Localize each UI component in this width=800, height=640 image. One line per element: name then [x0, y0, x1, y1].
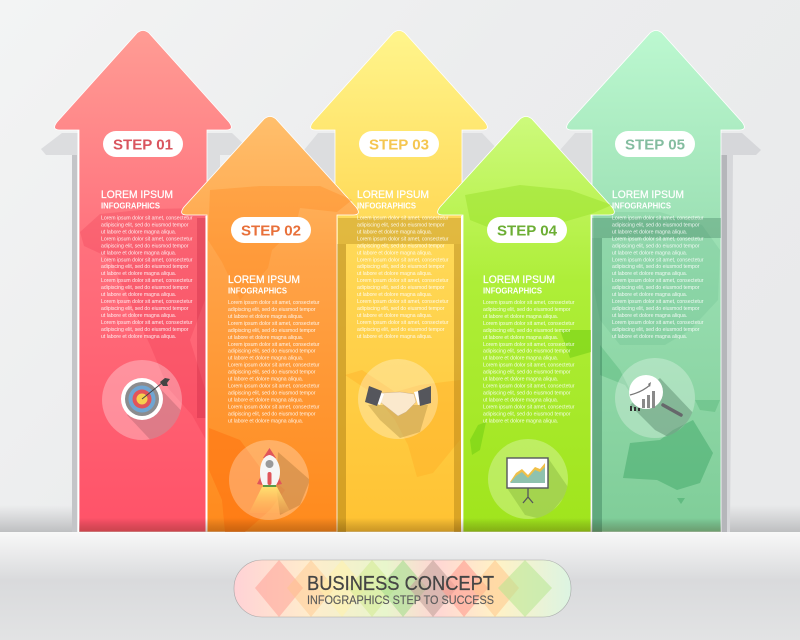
step 5 labels [612, 131, 704, 340]
step 2 pill: STEP 02 [241, 222, 301, 240]
step 3 body text: ut labore et dolore magna aliqua. [357, 292, 432, 298]
step 3 heading: INFOGRAPHICS [357, 202, 416, 210]
step 4 body text: ut labore et dolore magna aliqua. [483, 335, 558, 341]
step 5 body text: adipiscing elit, sed do eiusmod tempor [612, 306, 700, 312]
step 3 body text: Lorem ipsum dolor sit amet, consectetur [357, 299, 449, 305]
step 4 body text: ut labore et dolore magna aliqua. [483, 418, 558, 424]
step 1 body text: Lorem ipsum dolor sit amet, consectetur [101, 257, 193, 263]
step 2 body text: Lorem ipsum dolor sit amet, consectetur [228, 384, 320, 390]
step 5 body text: adipiscing elit, sed do eiusmod tempor [612, 264, 700, 270]
step 2 body text: ut labore et dolore magna aliqua. [228, 397, 303, 403]
step 2 body text: adipiscing elit, sed do eiusmod tempor [228, 411, 316, 417]
step 1 labels [101, 131, 193, 340]
step 4 body text: adipiscing elit, sed do eiusmod tempor [483, 349, 571, 355]
step 5 body text: ut labore et dolore magna aliqua. [612, 292, 687, 298]
step 3 body text: adipiscing elit, sed do eiusmod tempor [357, 285, 445, 291]
step 5 body text: adipiscing elit, sed do eiusmod tempor [612, 222, 700, 228]
step 2 pill [231, 217, 311, 243]
arrow 3: yellow [311, 30, 487, 532]
arrow 5: mint green [567, 30, 744, 532]
icon: rocket [229, 440, 310, 520]
step 4 heading [483, 274, 555, 296]
map: africa [345, 370, 460, 477]
banner title text: BUSINESS CONCEPT [307, 573, 494, 595]
step 4 body text: Lorem ipsum dolor sit amet, consectetur [483, 404, 575, 410]
step 1 body text: ut labore et dolore magna aliqua. [101, 313, 176, 319]
title banner [234, 560, 571, 617]
banner diamonds [255, 560, 552, 617]
step 3 body text: Lorem ipsum dolor sit amet, consectetur [357, 216, 449, 222]
step 5 body text: Lorem ipsum dolor sit amet, consectetur [612, 216, 704, 222]
step 3 pill: STEP 03 [369, 136, 429, 154]
step 2 body text: adipiscing elit, sed do eiusmod tempor [228, 349, 316, 355]
step 5 pill [615, 131, 695, 157]
step 5 body text: ut labore et dolore magna aliqua. [612, 229, 687, 235]
step 5 heading: LOREM IPSUM [612, 189, 684, 201]
step 1 body text: adipiscing elit, sed do eiusmod tempor [101, 327, 189, 333]
step 1 pill: STEP 01 [113, 136, 173, 154]
map: asia and australia [594, 212, 720, 345]
step 1 body text: adipiscing elit, sed do eiusmod tempor [101, 243, 189, 249]
step 1 body text: Lorem ipsum dolor sit amet, consectetur [101, 278, 193, 284]
map: eurasia and madagascar [465, 185, 612, 232]
step 4 body text: ut labore et dolore magna aliqua. [483, 377, 558, 383]
arrow 2: orange [182, 116, 358, 532]
icon: presentation board [488, 439, 570, 520]
step 5 body text: adipiscing elit, sed do eiusmod tempor [612, 327, 700, 333]
step 3 body text: ut labore et dolore magna aliqua. [357, 313, 432, 319]
step 5 body text: ut labore et dolore magna aliqua. [612, 334, 687, 340]
step 3 heading: LOREM IPSUM [357, 189, 429, 201]
step 3 body text: adipiscing elit, sed do eiusmod tempor [357, 306, 445, 312]
step 2 labels [228, 217, 320, 424]
step 1 body text: ut labore et dolore magna aliqua. [101, 334, 176, 340]
step 3 body text: ut labore et dolore magna aliqua. [357, 250, 432, 256]
step 2 body text: adipiscing elit, sed do eiusmod tempor [228, 390, 316, 396]
step 1 body text: Lorem ipsum dolor sit amet, consectetur [101, 216, 193, 222]
step 2 heading: INFOGRAPHICS [228, 286, 287, 296]
step 2 body text: ut labore et dolore magna aliqua. [228, 356, 303, 362]
step 5 body text: Lorem ipsum dolor sit amet, consectetur [612, 278, 704, 284]
step 5 heading: INFOGRAPHICS [612, 202, 671, 210]
step 4 body text: Lorem ipsum dolor sit amet, consectetur [483, 363, 575, 369]
banner subtitle text: INFOGRAPHICS STEP TO SUCCESS [307, 595, 494, 607]
icon: target [102, 360, 182, 440]
step 1 heading: INFOGRAPHICS [101, 202, 160, 210]
floor band [0, 532, 800, 640]
step 4 body text: adipiscing elit, sed do eiusmod tempor [483, 307, 571, 313]
step 1 body text: adipiscing elit, sed do eiusmod tempor [101, 306, 189, 312]
step 1 body text: ut labore et dolore magna aliqua. [101, 292, 176, 298]
step 2 body text: adipiscing elit, sed do eiusmod tempor [228, 307, 316, 313]
step 2 body text: Lorem ipsum dolor sit amet, consectetur [228, 404, 320, 410]
step 3 pill [359, 131, 439, 157]
step 3 body text: adipiscing elit, sed do eiusmod tempor [357, 327, 445, 333]
step 2 body text: adipiscing elit, sed do eiusmod tempor [228, 370, 316, 376]
step 2 heading: LOREM IPSUM [228, 274, 300, 286]
step 4 body text: adipiscing elit, sed do eiusmod tempor [483, 370, 571, 376]
step 2 body text: Lorem ipsum dolor sit amet, consectetur [228, 363, 320, 369]
neighbour shadow bands [197, 218, 721, 532]
step 1 body text: ut labore et dolore magna aliqua. [101, 250, 176, 256]
step 4 body text: adipiscing elit, sed do eiusmod tempor [483, 328, 571, 334]
step 1 body text: adipiscing elit, sed do eiusmod tempor [101, 222, 189, 228]
arrow 4: lime green [438, 116, 614, 532]
step 1 heading: LOREM IPSUM [101, 189, 173, 201]
step 4 body text: ut labore et dolore magna aliqua. [483, 314, 558, 320]
step 1 body text: Lorem ipsum dolor sit amet, consectetur [101, 320, 193, 326]
step 2 body text: ut labore et dolore magna aliqua. [228, 377, 303, 383]
step 2 body text: ut labore et dolore magna aliqua. [228, 335, 303, 341]
white shaft edges [78, 130, 463, 532]
step 4 pill: STEP 04 [497, 222, 558, 240]
step 4 pill [487, 217, 567, 243]
step 3 body text: ut labore et dolore magna aliqua. [357, 271, 432, 277]
step 4 body text: adipiscing elit, sed do eiusmod tempor [483, 390, 571, 396]
step 3 labels [357, 131, 449, 340]
step 1 body text: ut labore et dolore magna aliqua. [101, 229, 176, 235]
step 4 body text: adipiscing elit, sed do eiusmod tempor [483, 411, 571, 417]
step 3 body text: ut labore et dolore magna aliqua. [357, 334, 432, 340]
step 3 body text: Lorem ipsum dolor sit amet, consectetur [357, 320, 449, 326]
step 3 body text: Lorem ipsum dolor sit amet, consectetur [357, 257, 449, 263]
step 4 heading: LOREM IPSUM [483, 274, 555, 286]
step 5 body text: Lorem ipsum dolor sit amet, consectetur [612, 257, 704, 263]
step 4 body text: Lorem ipsum dolor sit amet, consectetur [483, 342, 575, 348]
step 1 body text: adipiscing elit, sed do eiusmod tempor [101, 285, 189, 291]
step 3 body text: adipiscing elit, sed do eiusmod tempor [357, 264, 445, 270]
step 1 body text: adipiscing elit, sed do eiusmod tempor [101, 264, 189, 270]
step 2 body text: Lorem ipsum dolor sit amet, consectetur [228, 300, 320, 306]
step 3 body text: adipiscing elit, sed do eiusmod tempor [357, 243, 445, 249]
step 4 body text: Lorem ipsum dolor sit amet, consectetur [483, 321, 575, 327]
step 4 heading: INFOGRAPHICS [483, 286, 542, 296]
step 1 body text: Lorem ipsum dolor sit amet, consectetur [101, 299, 193, 305]
step 5 body text: Lorem ipsum dolor sit amet, consectetur [612, 320, 704, 326]
step 4 body text: Lorem ipsum dolor sit amet, consectetur [483, 300, 575, 306]
map: north america [80, 208, 206, 440]
step 3 body text: adipiscing elit, sed do eiusmod tempor [357, 222, 445, 228]
arrow 1: red [55, 30, 231, 532]
step 2 heading [228, 274, 300, 296]
step 5 body text: Lorem ipsum dolor sit amet, consectetur [612, 236, 704, 242]
icon: handshake [358, 359, 438, 439]
step 3 body text: Lorem ipsum dolor sit amet, consectetur [357, 236, 449, 242]
step 4 body text: ut labore et dolore magna aliqua. [483, 397, 558, 403]
step 2 body text: Lorem ipsum dolor sit amet, consectetur [228, 342, 320, 348]
step 3 heading [357, 189, 429, 210]
grey arrow shadows [41, 133, 761, 532]
step 5 body text: adipiscing elit, sed do eiusmod tempor [612, 243, 700, 249]
step 2 body text: adipiscing elit, sed do eiusmod tempor [228, 328, 316, 334]
step 1 heading [101, 189, 173, 210]
step 4 body text: ut labore et dolore magna aliqua. [483, 356, 558, 362]
step 4 labels [483, 217, 575, 424]
step 2 body text: ut labore et dolore magna aliqua. [228, 314, 303, 320]
map: atlantic land masses [208, 186, 352, 300]
step 2 body text: Lorem ipsum dolor sit amet, consectetur [228, 321, 320, 327]
step 5 body text: Lorem ipsum dolor sit amet, consectetur [612, 299, 704, 305]
step 5 body text: ut labore et dolore magna aliqua. [612, 271, 687, 277]
step 1 body text: Lorem ipsum dolor sit amet, consectetur [101, 236, 193, 242]
step 1 pill [103, 131, 183, 157]
step 4 body text: Lorem ipsum dolor sit amet, consectetur [483, 384, 575, 390]
step 5 body text: ut labore et dolore magna aliqua. [612, 250, 687, 256]
step 5 pill: STEP 05 [625, 136, 685, 154]
step 5 body text: adipiscing elit, sed do eiusmod tempor [612, 285, 700, 291]
step 5 heading [612, 189, 684, 210]
icon: magnifier [615, 358, 695, 438]
step 1 body text: ut labore et dolore magna aliqua. [101, 271, 176, 277]
step 5 body text: ut labore et dolore magna aliqua. [612, 313, 687, 319]
step 3 body text: ut labore et dolore magna aliqua. [357, 229, 432, 235]
bottom shading of arrows [79, 518, 721, 532]
step 3 body text: Lorem ipsum dolor sit amet, consectetur [357, 278, 449, 284]
step 2 body text: ut labore et dolore magna aliqua. [228, 418, 303, 424]
